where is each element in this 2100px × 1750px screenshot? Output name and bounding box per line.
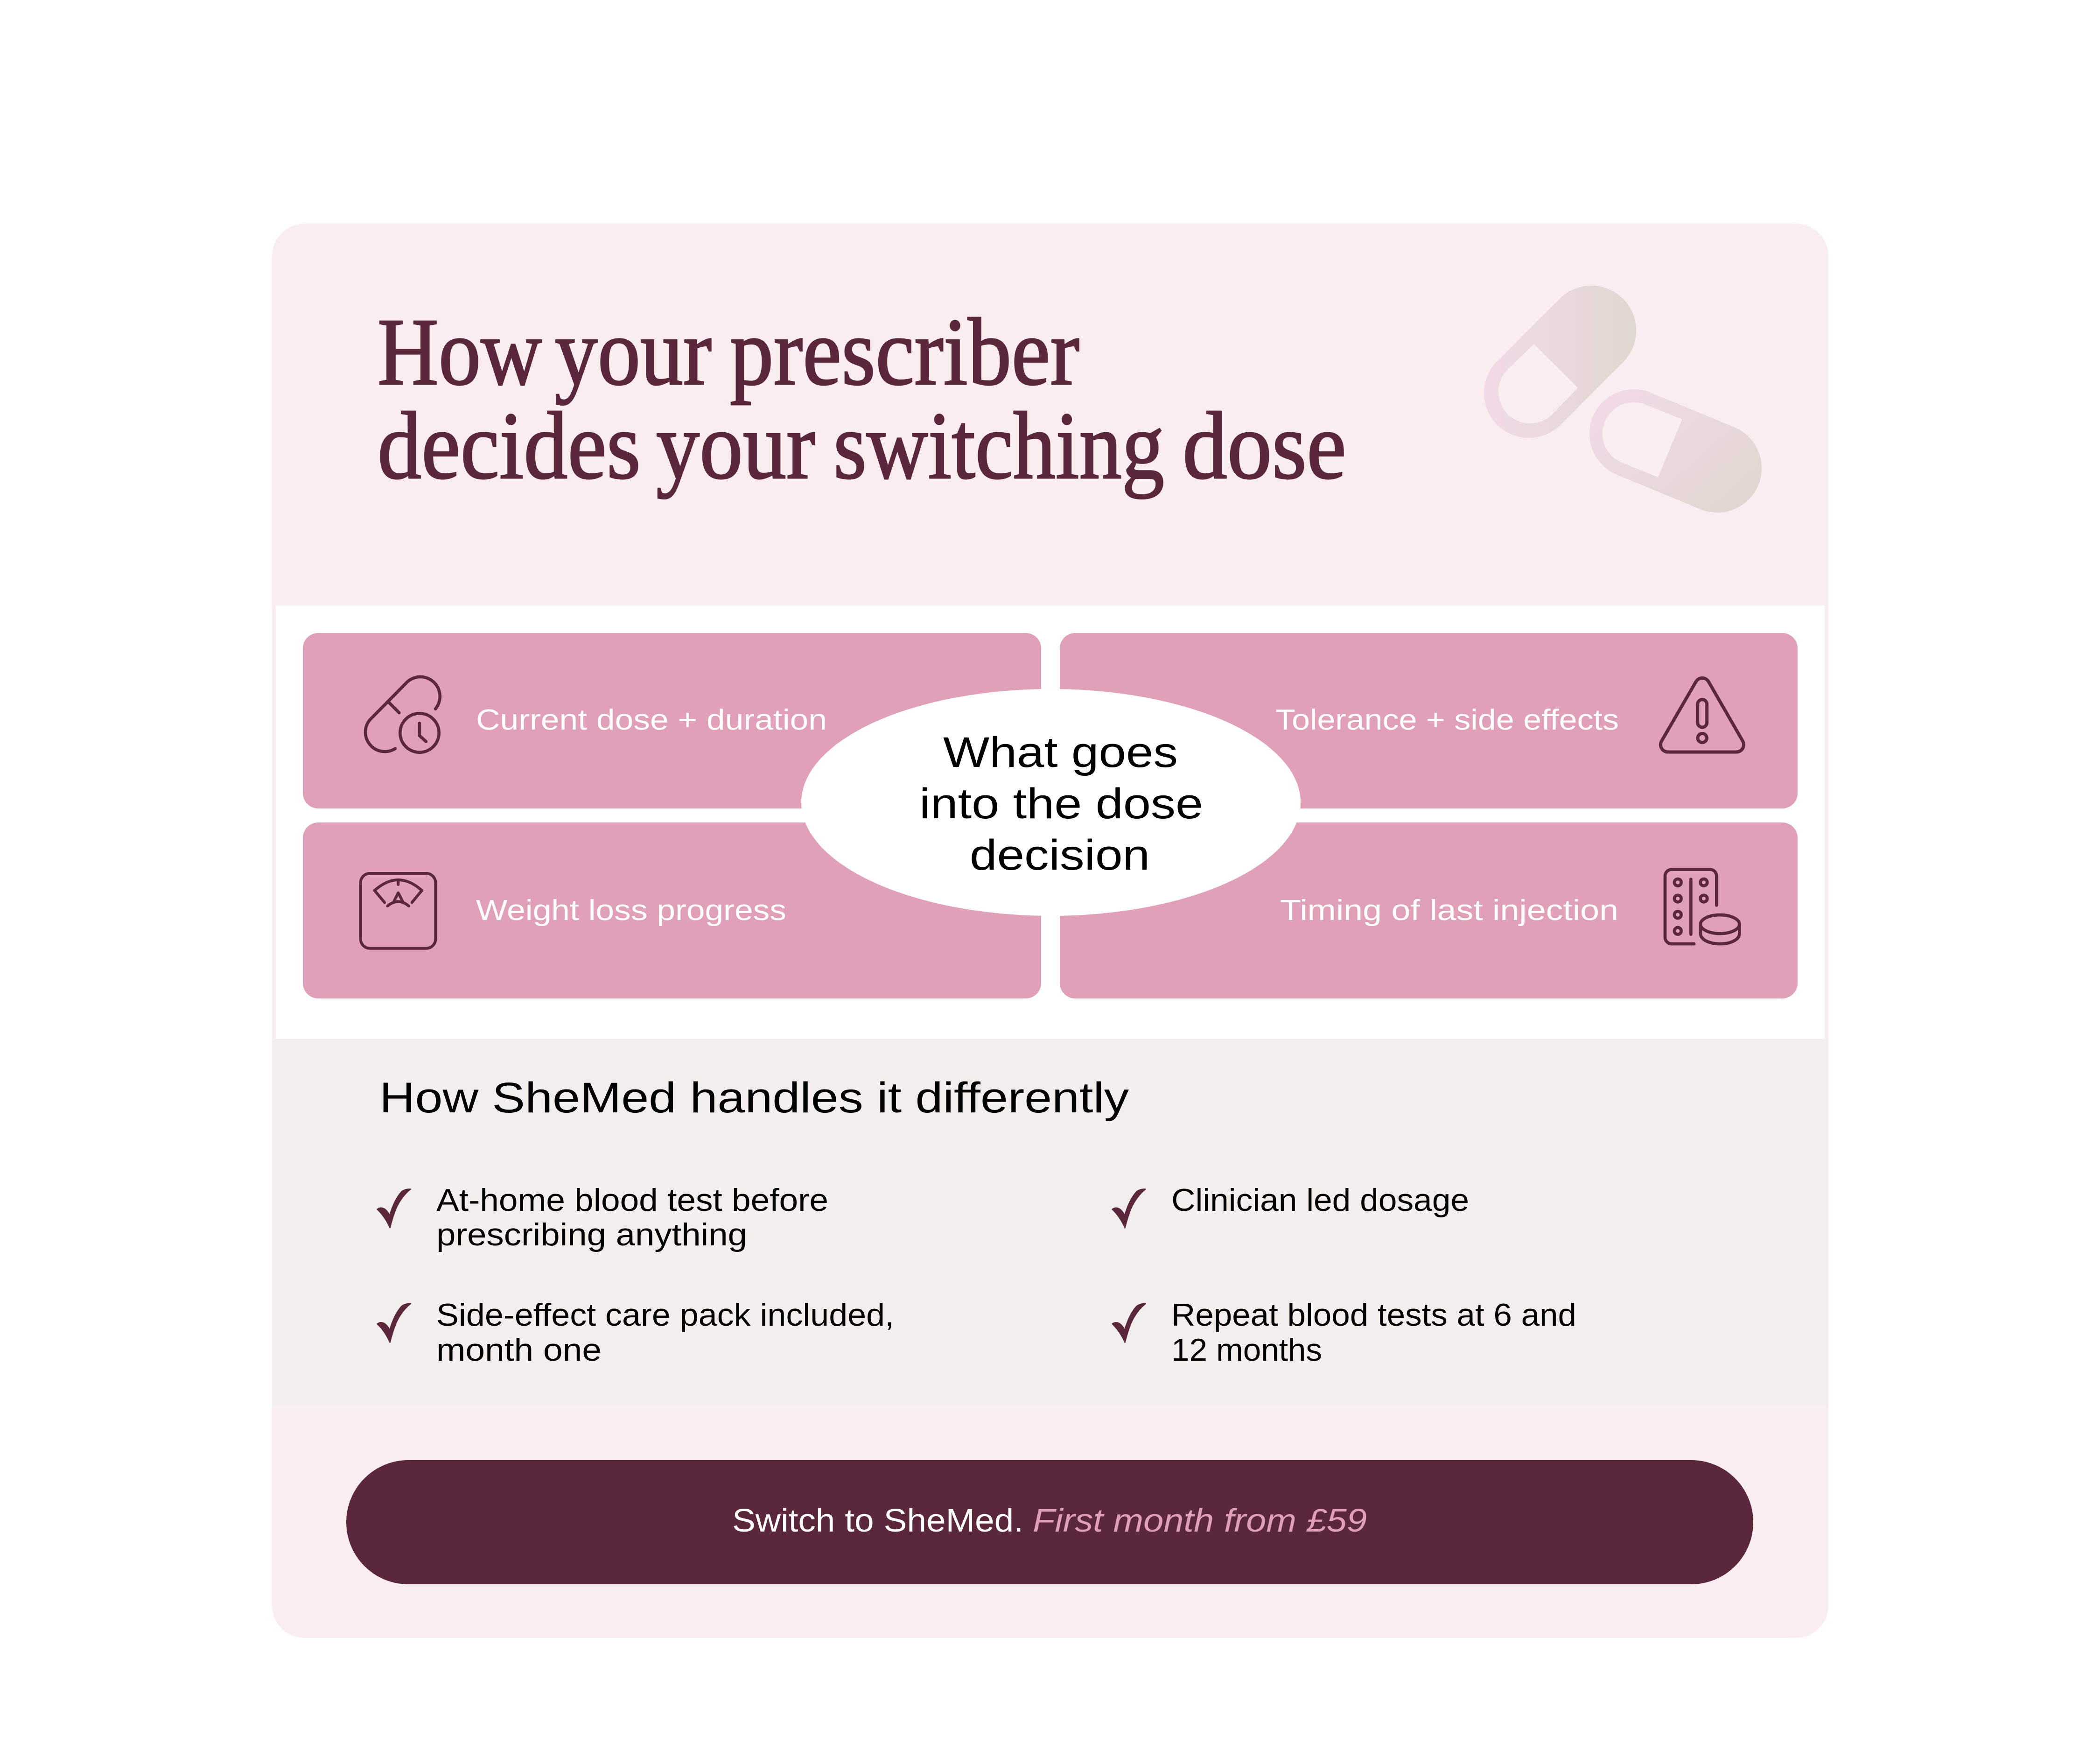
panel: dose decision factors	[276, 605, 1825, 1039]
icon: weighing scale	[361, 873, 435, 949]
centre ellipse	[801, 689, 1301, 916]
centre heading: into the dose	[919, 780, 1203, 828]
title: dose	[1183, 392, 1346, 499]
icon: pill with clock	[365, 677, 440, 752]
label: Timing of last injection	[1280, 894, 1618, 927]
item: repeat blood tests: Repeat blood tests at 6 and	[1171, 1297, 1576, 1333]
section heading: How SheMed handles it differently	[379, 1074, 1129, 1122]
item: repeat blood tests: 12 months	[1171, 1332, 1322, 1368]
card background	[272, 224, 1828, 1638]
item: side-effect care pack: Side-effect care pack included,	[436, 1297, 894, 1333]
title: decides	[378, 392, 641, 499]
call to action button: Switch to SheMed.	[732, 1502, 1023, 1539]
icon: blister pack and tablet	[1665, 870, 1739, 944]
label: Current dose + duration	[476, 704, 827, 736]
item: side-effect care pack	[377, 1297, 894, 1368]
title: switching	[833, 392, 1164, 499]
item: at-home blood test: At-home blood test before	[436, 1182, 828, 1218]
label: Tolerance + side effects	[1275, 704, 1619, 736]
icon: capsules	[1484, 286, 1762, 513]
panel: header	[378, 286, 1762, 513]
title: your	[555, 298, 712, 405]
title	[378, 298, 1346, 499]
icon: warning triangle	[1660, 678, 1744, 752]
card: tolerance + side effects	[1060, 633, 1798, 808]
item: at-home blood test: prescribing anything	[436, 1217, 747, 1252]
call to action button	[346, 1460, 1753, 1584]
centre heading: What goes	[943, 729, 1178, 776]
card: timing of last injection	[1060, 822, 1798, 998]
item: clinician led dosage: Clinician led dosage	[1171, 1182, 1469, 1218]
centre heading: decision	[970, 831, 1150, 879]
call to action button: First month from £59	[1033, 1502, 1367, 1539]
label: Weight loss progress	[476, 894, 786, 927]
title: prescriber	[730, 298, 1079, 405]
item: at-home blood test	[377, 1182, 828, 1252]
item: clinician led dosage	[1112, 1182, 1469, 1228]
panel: how SheMed handles it differently	[272, 1039, 1828, 1405]
title: How	[378, 298, 542, 405]
item: repeat blood tests	[1112, 1297, 1576, 1368]
centre heading	[919, 729, 1203, 879]
card: current dose + duration	[303, 633, 1041, 808]
card: weight loss progress	[303, 822, 1041, 998]
item: side-effect care pack: month one	[436, 1332, 602, 1368]
title: your	[656, 392, 815, 499]
